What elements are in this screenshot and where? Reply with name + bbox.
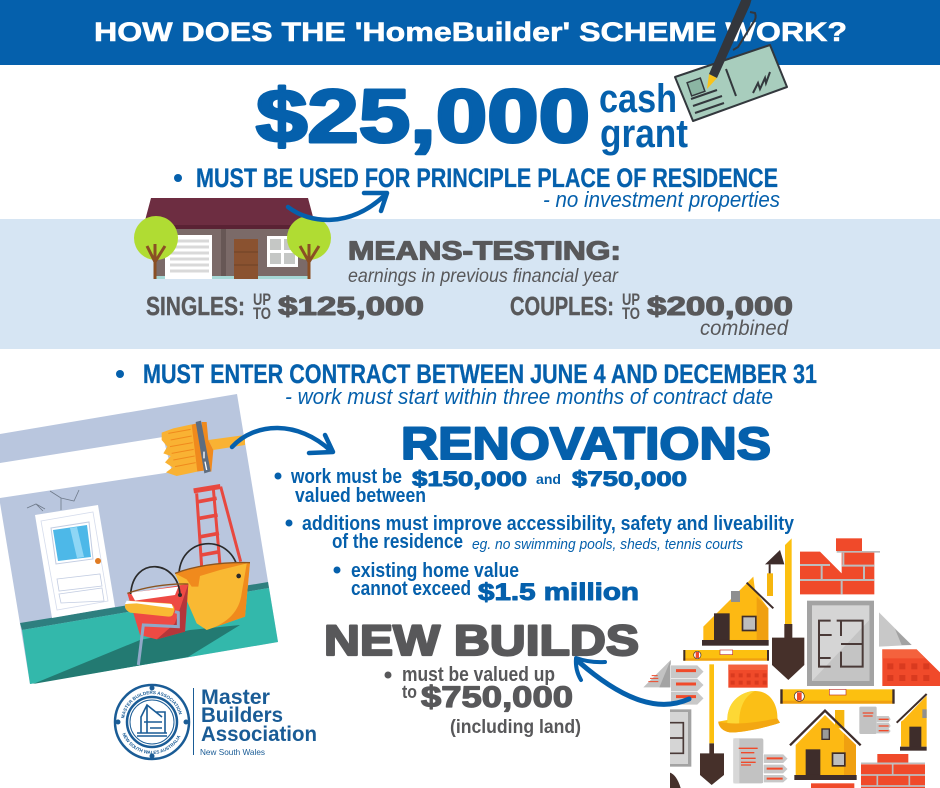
arrow: paintbrush to renovations <box>232 428 333 453</box>
arrow: montage to new builds <box>576 658 689 704</box>
singles threshold <box>146 290 424 323</box>
renovations: additions rule <box>286 513 795 553</box>
renovations: value range: $150,000 <box>412 467 527 491</box>
illustration: renovation scene <box>0 394 278 684</box>
renovations heading: RENOVATIONS <box>401 418 771 469</box>
new builds: value cap: $750,000 <box>421 681 573 714</box>
criterion: principal place of residence: MUST BE USED FOR PRINCIPLE PLACE OF RESIDENCE <box>196 163 778 193</box>
criterion: principal place of residence: - no investment properties <box>543 187 780 212</box>
criterion: contract dates: - work must start within three months of contract date <box>285 384 773 409</box>
renovations: value range: valued between <box>295 485 426 507</box>
couples threshold: COUPLES: <box>510 291 614 321</box>
logo: Master Builders Association: Builders <box>201 704 283 727</box>
renovations: additions rule: of the residence <box>332 531 463 553</box>
headline amount: $25,000 <box>256 74 590 158</box>
renovations: value range: work must be <box>290 466 402 488</box>
logo seal: MASTER BUILDERS ASSOCIATION <box>121 690 182 718</box>
renovations: additions rule: eg. no swimming pools, sheds, tennis courts <box>472 536 743 553</box>
renovations: value range <box>274 466 687 507</box>
couples threshold: combined <box>700 317 789 340</box>
singles threshold: SINGLES: <box>146 291 245 321</box>
header banner <box>0 0 940 65</box>
new builds heading: NEW BUILDS <box>324 617 639 665</box>
header banner: HOW DOES THE 'HomeBuilder' SCHEME WORK? <box>94 17 847 47</box>
means-testing heading: earnings in previous financial year <box>348 266 619 287</box>
logo: Master Builders Association: Master <box>201 686 270 709</box>
headline amount: grant <box>600 112 688 156</box>
icon: cheque and pen <box>675 0 787 121</box>
renovations: home value cap <box>334 560 639 606</box>
means-testing background band <box>0 219 940 349</box>
means-testing heading <box>348 236 621 287</box>
renovations: value range: and <box>536 471 561 487</box>
renovations: value range: $750,000 <box>572 467 687 491</box>
couples threshold: $200,000 <box>647 291 793 321</box>
criterion: principal place of residence <box>174 163 780 212</box>
singles threshold: TO <box>253 304 271 323</box>
arrow: house to criteria <box>288 193 387 220</box>
couples threshold: TO <box>622 304 640 323</box>
new builds: value cap: must be valued up <box>402 664 555 686</box>
couples threshold: UP <box>622 290 640 309</box>
singles threshold: $125,000 <box>278 291 424 321</box>
couples threshold <box>510 290 793 340</box>
renovations: home value cap: cannot exceed <box>351 578 471 600</box>
logo: Master Builders Association: New South Wales <box>200 747 265 757</box>
headline amount: cash <box>599 77 677 121</box>
singles threshold: UP <box>253 290 271 309</box>
logo seal: NEW SOUTH WALES AUSTRALIA <box>122 732 180 754</box>
new builds: value cap <box>384 664 581 738</box>
renovations: additions rule: additions must improve accessibility, safety and liveability <box>302 513 795 535</box>
logo seal <box>114 684 190 760</box>
illustration: construction house montage <box>643 538 940 788</box>
new builds: value cap: to <box>402 682 417 702</box>
logo: Master Builders Association <box>114 684 317 760</box>
logo: Master Builders Association: Association <box>201 723 317 746</box>
icon: house with trees <box>134 198 331 279</box>
headline amount <box>256 74 688 158</box>
renovations: home value cap: $1.5 million <box>478 579 639 606</box>
means-testing heading: MEANS-TESTING: <box>348 236 621 266</box>
criterion: contract dates <box>116 359 817 409</box>
renovations: home value cap: existing home value <box>351 560 519 582</box>
new builds: value cap: (including land) <box>450 717 581 738</box>
